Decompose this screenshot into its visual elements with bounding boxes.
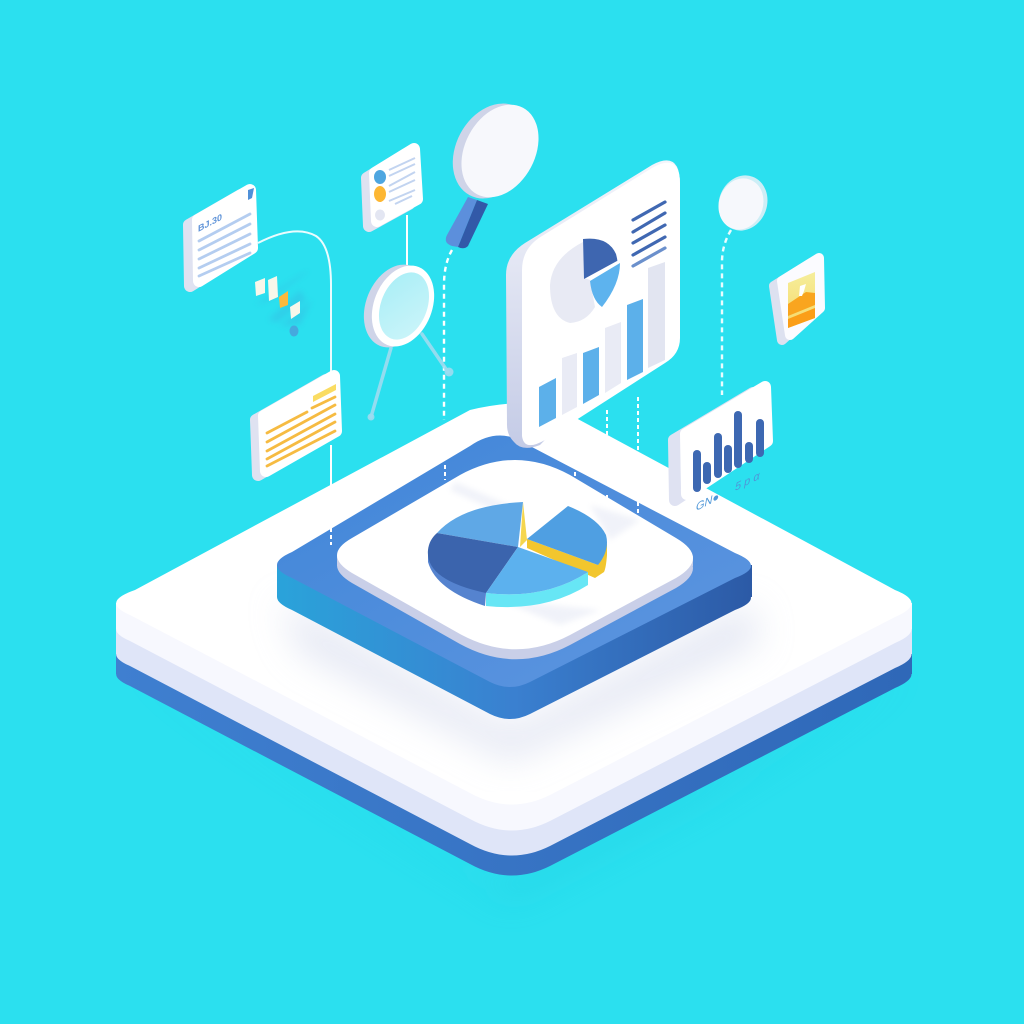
bar 3	[583, 347, 599, 404]
base platform	[116, 403, 912, 876]
card label: BJ.30	[198, 212, 222, 235]
base: surface shadow	[280, 600, 760, 760]
floating data blocks	[255, 270, 312, 336]
chart axis labels: GN●	[696, 490, 719, 514]
blue dot	[290, 326, 298, 336]
magnifier glass	[446, 91, 554, 211]
lens rim	[360, 256, 446, 356]
base: lavender middle layer	[116, 454, 912, 856]
yellow card lines	[267, 397, 335, 466]
connector: card to yellow card	[258, 231, 331, 372]
large dashboard panel	[506, 160, 680, 448]
picture sky	[788, 272, 815, 328]
chart card side	[674, 393, 755, 500]
orange block	[279, 291, 288, 308]
faint blue shadows	[255, 270, 312, 326]
card corner mark	[248, 188, 254, 200]
list icons	[374, 170, 386, 184]
panel grey pie	[550, 242, 595, 323]
magnifier handle light side	[446, 197, 477, 247]
card surface	[337, 460, 693, 649]
pie: dark wedge side	[428, 550, 486, 606]
list card side	[367, 154, 409, 226]
pie: dark wedge	[428, 533, 518, 593]
balloon lens	[711, 168, 775, 238]
chart bars	[697, 415, 760, 488]
pie: thin yellow slit	[520, 502, 527, 547]
pie: cyan wedge side	[486, 572, 588, 607]
chart axis labels right: 5 p α	[735, 469, 760, 494]
yellow text card	[256, 376, 336, 475]
large magnifier	[437, 89, 554, 248]
list card face	[375, 149, 417, 221]
connector: magnifier dashed	[444, 250, 452, 420]
tripod lens	[352, 255, 454, 420]
pie: detached wedge	[527, 506, 607, 565]
leg feet	[368, 368, 454, 420]
pie: light wedge	[486, 547, 588, 594]
picture card face	[782, 258, 820, 335]
connector: card to lens	[406, 215, 408, 268]
list lines	[389, 158, 415, 204]
connector lines	[258, 215, 731, 545]
base: white edge layer	[116, 429, 912, 831]
orange dot	[374, 186, 386, 202]
grey dot	[375, 210, 385, 220]
picture sun glyph	[799, 284, 806, 296]
lens rim back	[352, 255, 440, 357]
block top	[277, 436, 751, 687]
card lines	[199, 214, 250, 276]
inner white card	[337, 460, 693, 659]
connector: yellow card to base	[330, 445, 332, 490]
bar 2	[562, 353, 577, 415]
panel light wedge	[590, 263, 620, 307]
central blue block	[277, 436, 752, 719]
picture lower band	[788, 308, 815, 328]
white blocks	[255, 276, 300, 319]
list card	[367, 149, 417, 226]
magnifier handle dark side	[458, 200, 488, 248]
ground shadow	[110, 660, 915, 900]
bar 5	[627, 299, 643, 380]
picture card side	[774, 263, 812, 340]
base: top surface	[116, 403, 911, 805]
panel bars	[539, 262, 665, 427]
panel depth	[506, 160, 680, 448]
document card	[189, 188, 254, 286]
balloon rim	[711, 168, 775, 238]
magnifier rim	[437, 89, 549, 213]
card side	[189, 195, 243, 286]
block side	[277, 468, 752, 719]
bar 4	[605, 322, 621, 393]
balloon face	[711, 172, 771, 236]
pie: yellow wedge edge	[527, 539, 607, 578]
picture card	[774, 258, 820, 340]
yellow card side	[256, 380, 328, 475]
panel dark wedge	[583, 239, 617, 279]
base: blue bottom layer	[116, 474, 912, 876]
bar 6	[648, 262, 665, 368]
picture hill	[788, 292, 815, 316]
card thickness	[337, 470, 693, 659]
yellow card title	[313, 384, 336, 402]
connector: dashes on block	[331, 397, 638, 545]
yellow card face	[264, 376, 336, 471]
lens glass	[370, 265, 438, 347]
pie: top wedge	[437, 502, 523, 547]
chart card face	[686, 387, 767, 494]
bar chart card	[674, 387, 767, 514]
lens legs	[371, 334, 448, 417]
card soft streaks	[450, 482, 640, 625]
card face	[198, 190, 252, 281]
3D pie chart	[428, 502, 607, 607]
panel face	[522, 163, 680, 445]
bar 1	[539, 378, 556, 427]
connector: balloon dashed	[722, 230, 731, 395]
panel text lines	[633, 202, 665, 266]
